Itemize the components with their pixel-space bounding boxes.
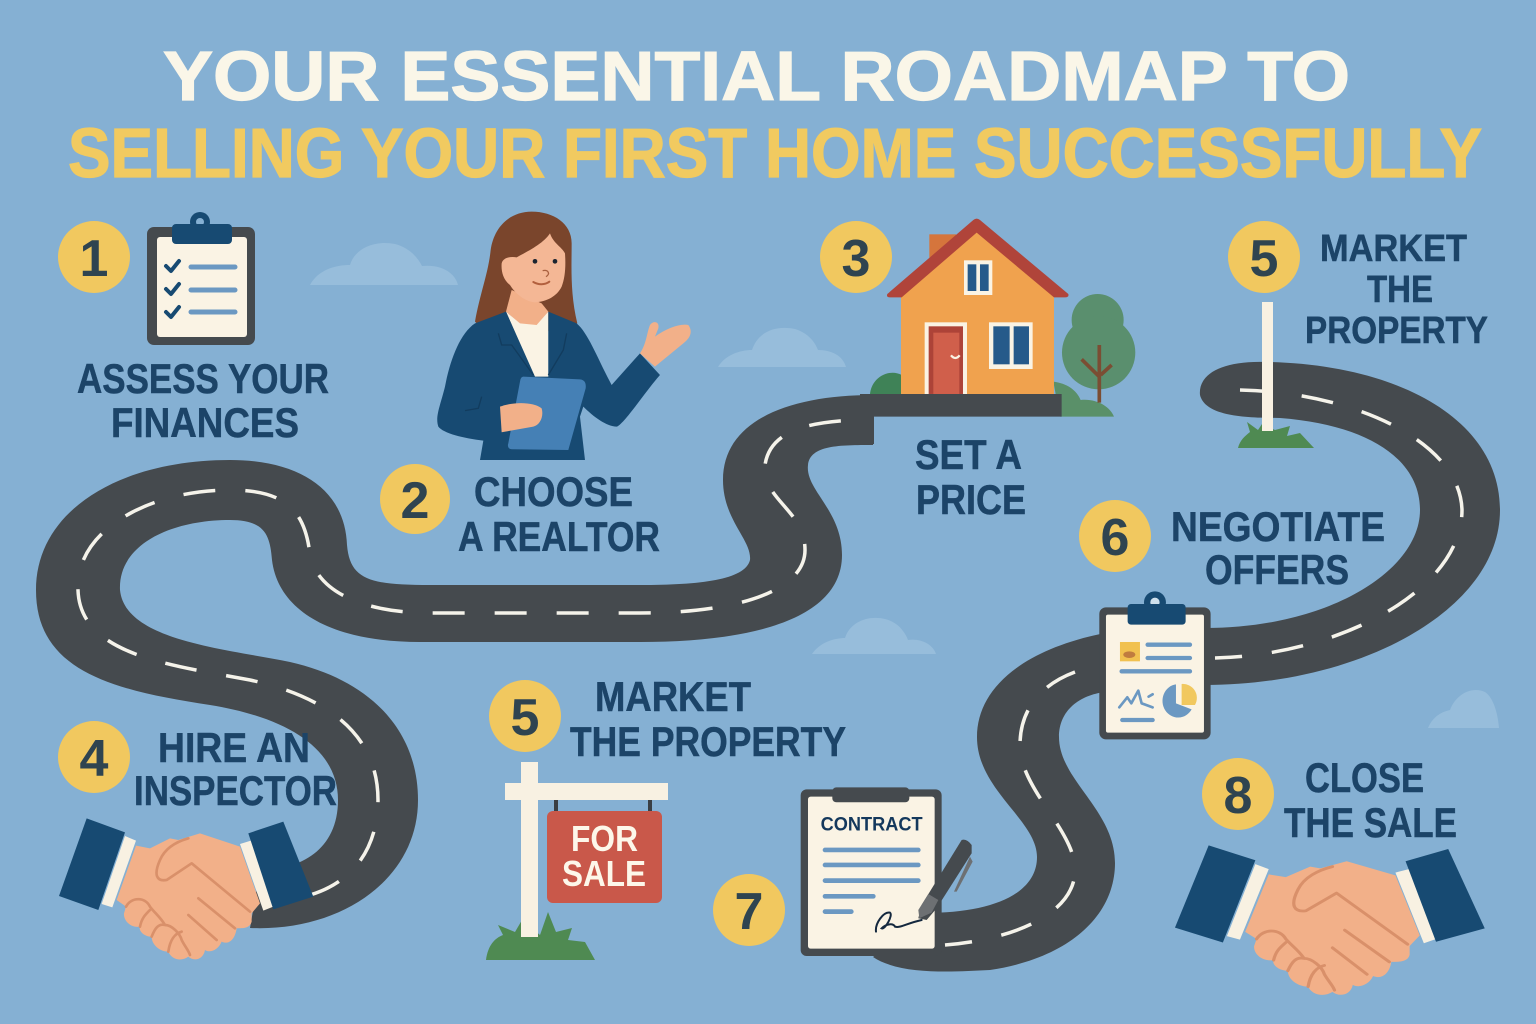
step 6 label: [1171, 503, 1385, 593]
step 3 label: [915, 431, 1026, 523]
icon: handshake left: [59, 818, 313, 959]
icon: for sale sign: [486, 762, 668, 960]
step 5 label (upper): MARKET: [1320, 228, 1467, 270]
step 5 label (upper): [1305, 228, 1488, 352]
step 4 number badge: [58, 721, 130, 793]
illustration: realtor woman: [437, 212, 691, 460]
step 4 label: HIRE AN: [158, 724, 310, 771]
step 3 number badge: [820, 221, 892, 293]
step 8 label: CLOSE: [1305, 754, 1424, 801]
step 5 label (lower): [570, 673, 846, 765]
icon: sign post on road: [1238, 302, 1314, 448]
icon: signed contract with pen: [801, 787, 973, 956]
step 3 label: PRICE: [916, 476, 1026, 523]
step 2 number badge: 2: [401, 472, 429, 530]
step 1 label: FINANCES: [111, 399, 299, 446]
step 5 number badge (lower): [489, 680, 561, 752]
step 6 number badge: [1079, 500, 1151, 572]
step 5 number badge (upper): 5: [1250, 230, 1278, 288]
step 3 label: SET A: [915, 431, 1022, 478]
step 6 label: NEGOTIATE: [1171, 503, 1385, 550]
cloud: lower centre: [812, 618, 936, 654]
road: upper right section: [1200, 362, 1500, 685]
icon: handshake right: [1175, 845, 1485, 995]
step 1 label: [77, 355, 329, 446]
step 8 number badge: 8: [1224, 767, 1252, 825]
icon: for sale sign: SALE: [562, 853, 646, 894]
step 6 number badge: 6: [1101, 509, 1129, 567]
icon: signed contract with pen: CONTRACT: [821, 815, 923, 836]
step 5 label (lower): THE PROPERTY: [570, 718, 846, 765]
step 2 label: [458, 468, 660, 560]
step 5 label (lower): MARKET: [595, 673, 751, 720]
step 7 number badge: 7: [735, 883, 763, 941]
step 8 label: THE SALE: [1284, 799, 1457, 846]
title: [68, 37, 1482, 192]
step 1 number badge: [58, 221, 130, 293]
cloud: lower right: [1428, 690, 1499, 728]
step 2 label: CHOOSE: [474, 468, 633, 515]
step 3 number badge: 3: [842, 230, 870, 288]
illustration: house with tree: [860, 219, 1135, 445]
step 4 label: [134, 724, 337, 814]
step 8 label: [1284, 754, 1457, 846]
step 1 number badge: 1: [80, 230, 108, 288]
step 4 number badge: 4: [80, 730, 109, 788]
step 1 label: ASSESS YOUR: [77, 355, 329, 402]
title: YOUR ESSENTIAL ROADMAP TO: [163, 37, 1350, 115]
step 8 number badge: [1202, 758, 1274, 830]
step 5 number badge (lower): 5: [511, 689, 539, 747]
step 5 number badge (upper): [1228, 221, 1300, 293]
icon: checklist clipboard: [147, 212, 255, 345]
road: left winding section: [36, 395, 873, 928]
road: lower right section: [873, 633, 1115, 972]
step 5 label (upper): THE: [1367, 269, 1433, 311]
step 2 number badge: [380, 464, 450, 534]
step 6 label: OFFERS: [1205, 546, 1349, 593]
icon: report clipboard: [1099, 591, 1211, 739]
step 7 number badge: [713, 874, 785, 946]
step 5 label (upper): PROPERTY: [1305, 310, 1488, 352]
step 2 label: A REALTOR: [458, 513, 660, 560]
icon: for sale sign: FOR: [571, 818, 638, 859]
step 4 label: INSPECTOR: [134, 767, 337, 814]
cloud: upper left: [310, 243, 458, 285]
cloud: centre: [718, 328, 846, 367]
